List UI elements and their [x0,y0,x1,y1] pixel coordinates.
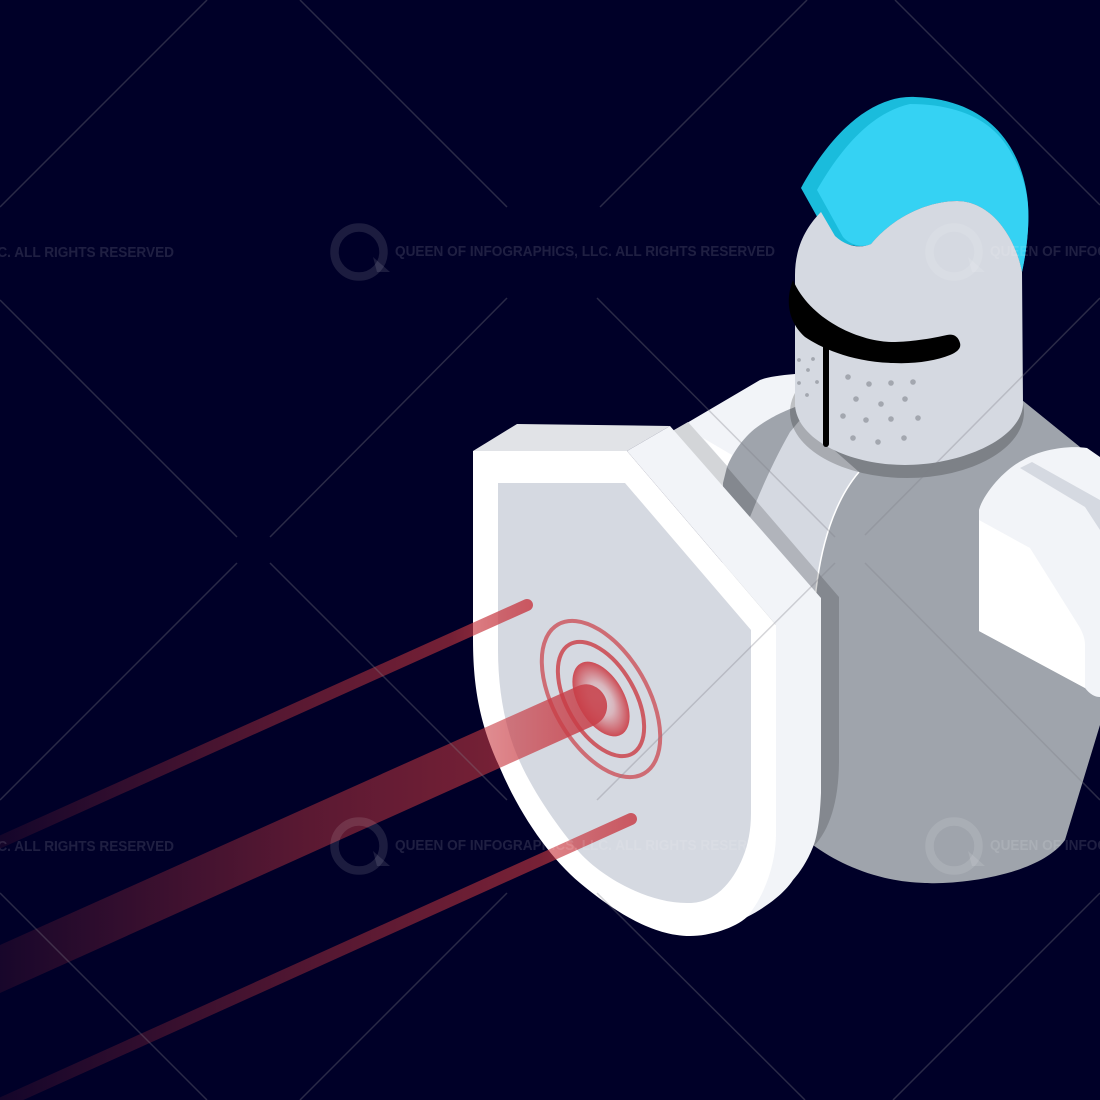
watermark logos [334,228,985,870]
helmet visor [789,280,960,363]
shield [473,424,821,936]
watermark text [0,244,1100,855]
shield inner panel [498,483,751,903]
chest sash [750,420,859,600]
left shoulder [660,374,800,495]
helmet slit [823,345,829,444]
shield shadow on torso [715,467,839,847]
torso [722,400,1100,883]
helmet breathing holes [797,357,921,445]
watermark text: QUEEN OF INFOGRAPHICS, LLC. ALL RIGHTS RESERVED [395,244,775,260]
laser beam: top [0,605,527,851]
helmet collar shadow [790,346,1024,478]
laser beam: bottom [0,819,631,1100]
laser beam: middle [0,684,607,1002]
helmet [789,201,1023,465]
shield side edge [627,426,821,925]
shield front face [473,451,776,936]
helmet crest [801,97,1028,272]
impact target rings [517,601,685,797]
right shoulder [979,447,1100,697]
watermark text: QUEEN OF INFOGRAPHICS, LLC. ALL RIGHTS RESERVED [395,838,775,854]
shield top edge [473,424,670,451]
